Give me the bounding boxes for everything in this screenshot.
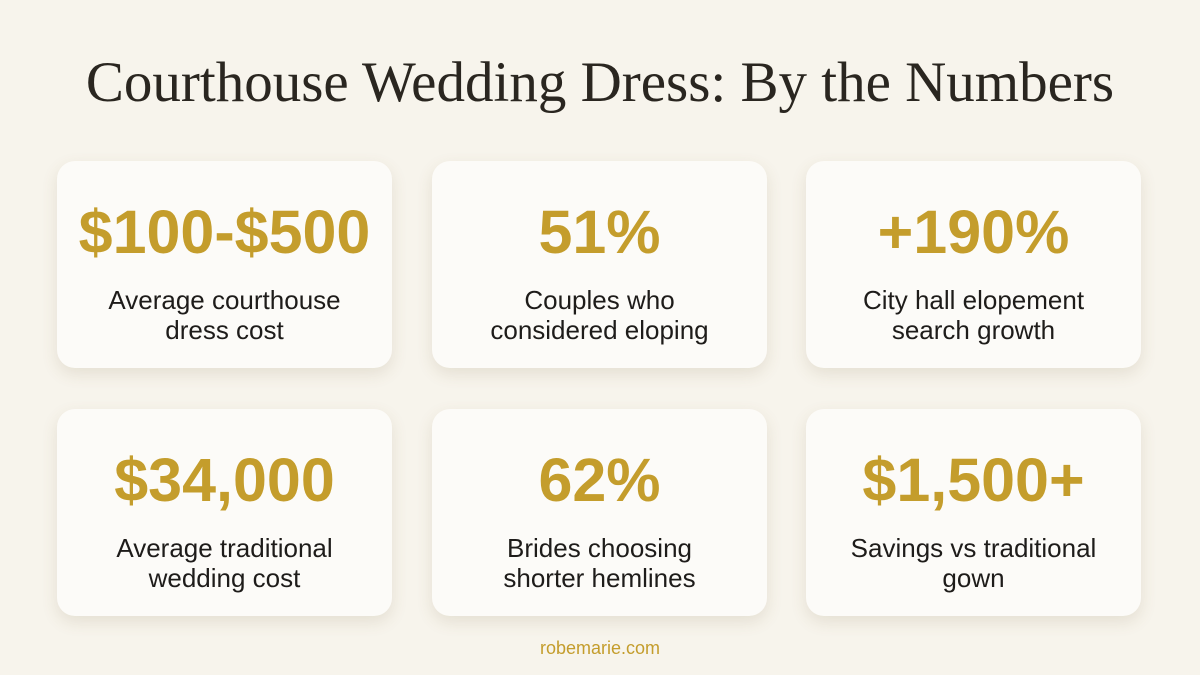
card: dress cost xyxy=(57,161,392,368)
card: search growth: +190% xyxy=(878,198,1069,266)
card: eloping: considered eloping xyxy=(490,315,709,345)
card: savings xyxy=(806,409,1141,616)
card: hemlines xyxy=(432,409,767,616)
card: traditional cost: $34,000 xyxy=(114,446,335,514)
card: savings: $1,500+ xyxy=(862,446,1085,514)
card: traditional cost: Average traditional xyxy=(116,533,333,563)
card: traditional cost xyxy=(57,409,392,616)
card: search growth: City hall elopement xyxy=(863,285,1084,315)
card: hemlines: 62% xyxy=(538,446,661,514)
card: eloping: Couples who xyxy=(524,285,675,315)
card: dress cost: $100-$500 xyxy=(79,198,370,266)
card: savings: Savings vs traditional xyxy=(851,533,1096,563)
card: traditional cost: wedding cost xyxy=(149,563,300,593)
card: search growth: search growth xyxy=(892,315,1055,345)
card: hemlines: shorter hemlines xyxy=(503,563,696,593)
card: eloping: 51% xyxy=(538,198,661,266)
card: dress cost: Average courthouse xyxy=(108,285,341,315)
title: Courthouse Wedding Dress: By the Numbers xyxy=(86,51,1114,114)
card: eloping xyxy=(432,161,767,368)
card: savings: gown xyxy=(942,563,1005,593)
footer: robemarie.com xyxy=(540,638,660,658)
card: hemlines: Brides choosing xyxy=(507,533,692,563)
card: dress cost: dress cost xyxy=(165,315,284,345)
card: search growth xyxy=(806,161,1141,368)
